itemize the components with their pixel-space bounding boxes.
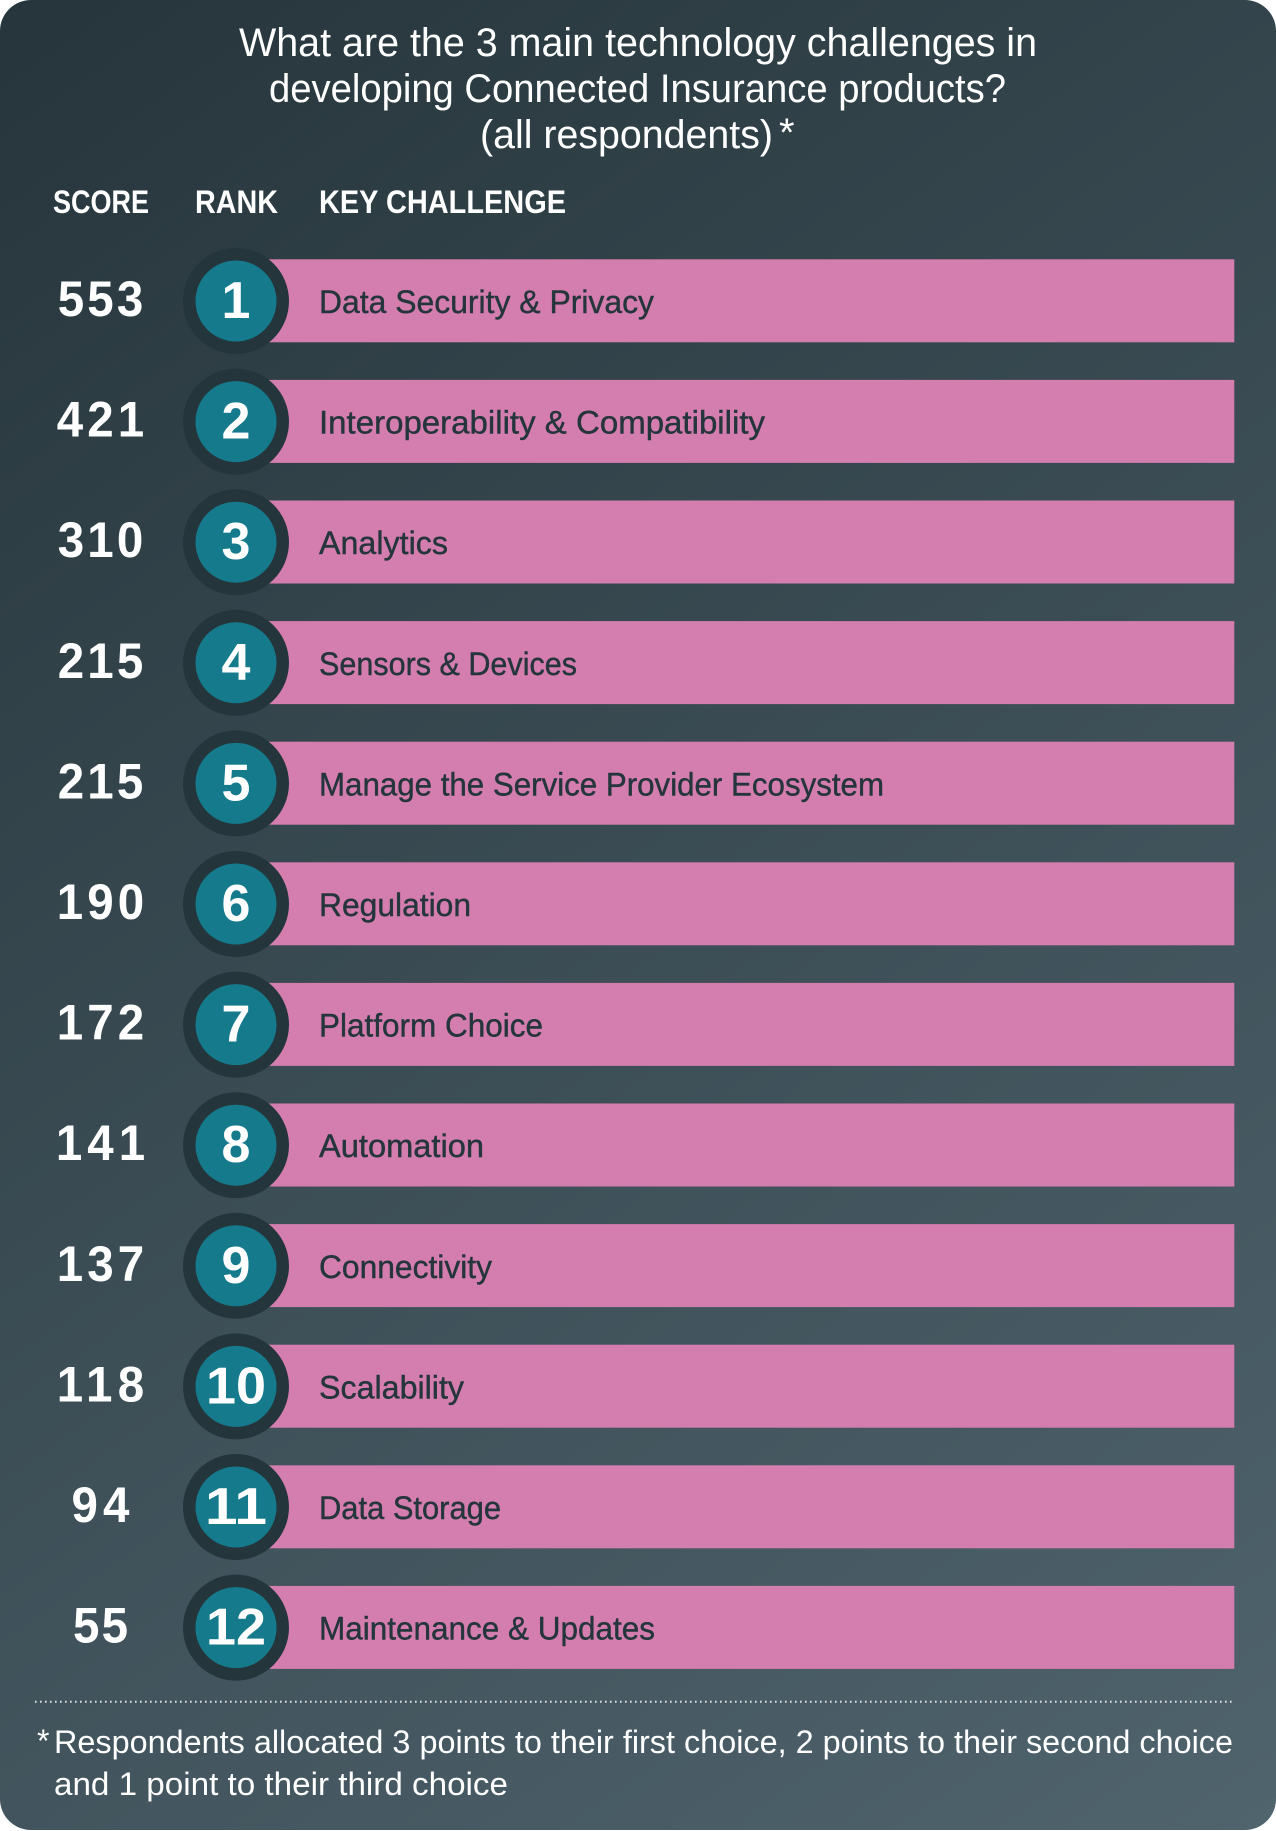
challenge label: Data Security & Privacy: [319, 284, 654, 320]
bar: [236, 742, 1234, 825]
bar: [236, 1345, 1234, 1428]
rank badge: 7: [222, 996, 250, 1054]
bar: [236, 1586, 1234, 1669]
challenge label: Platform Choice: [319, 1008, 543, 1044]
rank badge: 10: [206, 1357, 266, 1415]
title: (all respondents): [480, 113, 773, 157]
rank badge: 3: [222, 513, 250, 571]
bar: [236, 621, 1234, 704]
score: 421: [57, 393, 144, 448]
bar: [236, 1224, 1234, 1307]
row 8: Automation: [56, 1092, 1234, 1198]
challenge label: Connectivity: [319, 1249, 492, 1285]
footnote: Respondents allocated 3 points to their first choice, 2 points to their second choice: [54, 1724, 1233, 1760]
bar: [236, 1104, 1234, 1186]
row 11: Data Storage: [72, 1454, 1234, 1560]
title: *: [779, 111, 795, 155]
score: 310: [58, 513, 143, 568]
rank badge: [183, 851, 289, 957]
rank badge: [183, 489, 289, 595]
rank badge: [183, 1454, 289, 1560]
row 4: Sensors & Devices: [58, 610, 1234, 716]
challenge label: Analytics: [319, 525, 448, 561]
rank badge: 4: [222, 634, 251, 692]
score: 141: [56, 1116, 145, 1171]
score: 172: [57, 996, 144, 1051]
column headings: KEY CHALLENGE: [319, 184, 566, 220]
rank badge: [183, 248, 289, 354]
rank badge: [183, 1092, 289, 1198]
challenge label: Maintenance & Updates: [319, 1611, 655, 1647]
score: 190: [57, 875, 144, 930]
rank badge: [183, 1575, 289, 1681]
column headings: SCORE: [53, 184, 149, 220]
bar: [236, 983, 1234, 1066]
rank badge: [183, 1213, 289, 1319]
rank badge: 6: [222, 875, 250, 933]
score: 137: [57, 1237, 144, 1292]
rank badge: 8: [222, 1116, 250, 1174]
rank badge: [183, 1333, 289, 1439]
rank badge: [183, 972, 289, 1078]
rank badge: 5: [222, 754, 250, 812]
challenge label: Sensors & Devices: [319, 646, 577, 682]
column headings: [53, 184, 566, 220]
row 9: Connectivity: [57, 1213, 1234, 1319]
row 7: Platform Choice: [57, 972, 1234, 1078]
footnote: *: [37, 1723, 49, 1759]
score: 215: [58, 754, 143, 810]
score: 55: [73, 1599, 128, 1654]
score: 215: [58, 634, 143, 689]
bar: [236, 380, 1234, 463]
rank badge: 1: [222, 272, 250, 330]
row 6: Regulation: [57, 851, 1234, 957]
title: [239, 21, 1037, 157]
column headings: RANK: [195, 184, 278, 220]
challenge label: Regulation: [319, 887, 471, 923]
rank badge: [183, 730, 289, 836]
row 2: Interoperability & Compatibility: [57, 369, 1234, 475]
bar: [236, 500, 1234, 584]
title: What are the 3 main technology challenges in: [239, 21, 1037, 65]
footnote: and 1 point to their third choice: [54, 1766, 508, 1802]
bar: [236, 259, 1234, 342]
rank badge: 2: [222, 393, 250, 451]
bar: [236, 1465, 1234, 1548]
score: 553: [58, 272, 143, 327]
footnote: [37, 1723, 1233, 1802]
bar: [236, 862, 1234, 945]
challenge label: Manage the Service Provider Ecosystem: [319, 766, 884, 802]
challenge label: Data Storage: [319, 1490, 501, 1526]
rank badge: 12: [206, 1599, 266, 1657]
row 3: Analytics: [58, 489, 1234, 595]
rank badge: [183, 369, 289, 475]
score: 94: [72, 1478, 129, 1533]
row 10: Scalability: [57, 1333, 1234, 1439]
challenge label: Scalability: [319, 1369, 464, 1405]
title: developing Connected Insurance products?: [269, 67, 1006, 111]
row 12: Maintenance & Updates: [73, 1575, 1234, 1681]
score: 118: [57, 1357, 144, 1413]
challenge label: Automation: [319, 1128, 484, 1164]
rank badge: [183, 610, 289, 716]
challenge label: Interoperability & Compatibility: [319, 405, 765, 441]
row 5: Manage the Service Provider Ecosystem: [58, 730, 1234, 836]
row 1: Data Security & Privacy: [58, 248, 1234, 354]
rank badge: 9: [222, 1237, 250, 1295]
rank badge: 11: [205, 1478, 267, 1536]
